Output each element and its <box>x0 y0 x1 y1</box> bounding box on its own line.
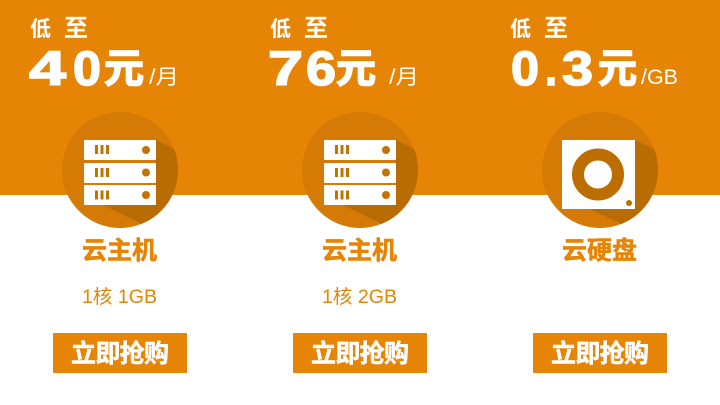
price: 76元 <box>268 43 376 96</box>
button: buy now: 立即抢购 <box>71 339 169 368</box>
unit: /月: /月 <box>389 66 419 89</box>
panel: cloud host 2GB <box>268 15 430 373</box>
price: 0.3元: . <box>545 43 557 96</box>
spec: 1核 1GB <box>82 286 157 308</box>
price label: 低至: 低 <box>510 18 531 41</box>
unit: /月: /月 <box>149 66 179 89</box>
price label: 低至: 至 <box>544 15 568 42</box>
price: 40元: 0 <box>73 43 101 96</box>
price: 40元 <box>29 43 144 96</box>
price: 40元: 元 <box>104 47 144 91</box>
unit: /GB: /GB <box>641 66 678 89</box>
spec: 1核 2GB <box>322 286 397 308</box>
price label: 低至: 低 <box>270 18 291 41</box>
icon: server <box>62 112 190 228</box>
product name: 云主机 <box>322 237 397 265</box>
product name: 云硬盘 <box>562 237 637 265</box>
button: buy now: 立即抢购 <box>311 339 409 368</box>
price: 0.3元 <box>511 43 637 96</box>
price: 76元: 7 <box>268 43 303 96</box>
price label: 低至: 至 <box>64 15 88 42</box>
button: buy now: 立即抢购 <box>551 339 649 368</box>
price: 76元: 元 <box>336 47 376 91</box>
button: buy now <box>53 333 187 373</box>
price label: 低至 <box>270 15 328 42</box>
price: 0.3元: 元 <box>598 47 637 91</box>
price label: 低至 <box>30 15 88 42</box>
product name: 云主机 <box>82 237 157 265</box>
panel: cloud disk <box>510 15 678 373</box>
icon: server <box>302 112 430 228</box>
price: 76元: 6 <box>306 43 336 96</box>
price: 0.3元: 0 <box>511 43 539 96</box>
price: 0.3元: 3 <box>562 43 593 96</box>
panel: cloud host 1GB <box>29 15 190 373</box>
price label: 低至: 低 <box>30 18 51 41</box>
price label: 低至: 至 <box>304 15 328 42</box>
price: 40元: 4 <box>29 43 66 96</box>
icon: hard disk <box>542 112 670 228</box>
price label: 低至 <box>510 15 568 42</box>
button: buy now <box>533 333 667 373</box>
button: buy now <box>293 333 427 373</box>
orange header band <box>0 0 720 195</box>
